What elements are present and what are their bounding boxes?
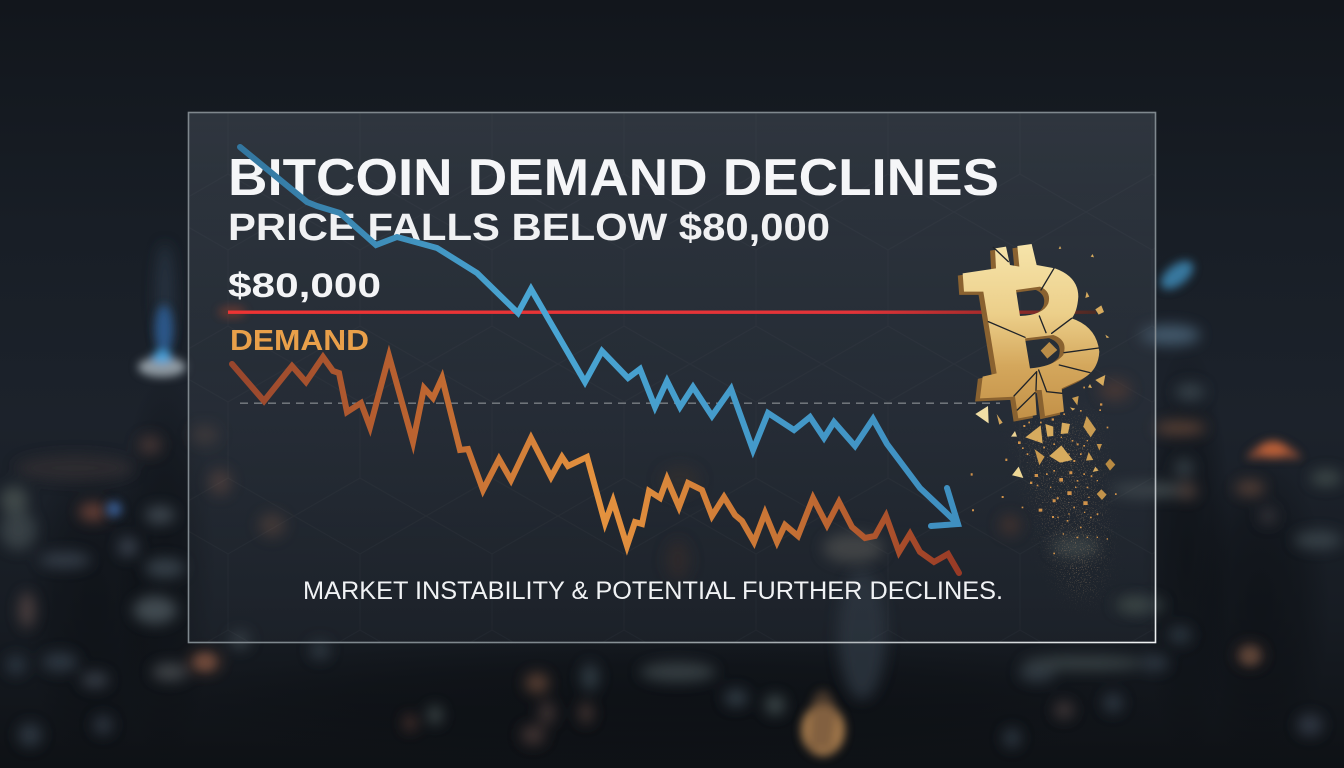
- city lights: [0, 243, 1342, 748]
- coin shards: [975, 246, 1115, 500]
- fracture lines: [988, 247, 1099, 410]
- coin dust speckle: [1020, 415, 1105, 600]
- inner shard: [1041, 342, 1057, 359]
- icon: shattering bitcoin symbol: [958, 244, 1117, 554]
- panel: glass chart card: [188, 112, 1156, 642]
- arrow head: [931, 488, 958, 526]
- main title: BITCOIN DEMAND DECLINES: [228, 149, 999, 207]
- demand label: DEMAND: [230, 325, 369, 357]
- footer caption: MARKET INSTABILITY & POTENTIAL FURTHER DECLINES.: [303, 577, 1003, 605]
- bitcoin gold face: [963, 244, 1099, 418]
- dashed reference line: [240, 402, 1000, 404]
- sharper glows: [106, 255, 1302, 756]
- subtitle: PRICE FALLS BELOW $80,000: [228, 207, 830, 249]
- bitcoin extruded edge: [958, 247, 1095, 421]
- coin dust particles: [971, 387, 1117, 554]
- demand line chart: [232, 356, 959, 573]
- panel lights, dim: [660, 379, 1146, 613]
- skyline building shadows: [25, 344, 1330, 766]
- price line chart with arrow: [240, 147, 958, 526]
- $80,000 threshold label: $80,000: [228, 267, 381, 305]
- $80,000 threshold line: [218, 306, 1096, 318]
